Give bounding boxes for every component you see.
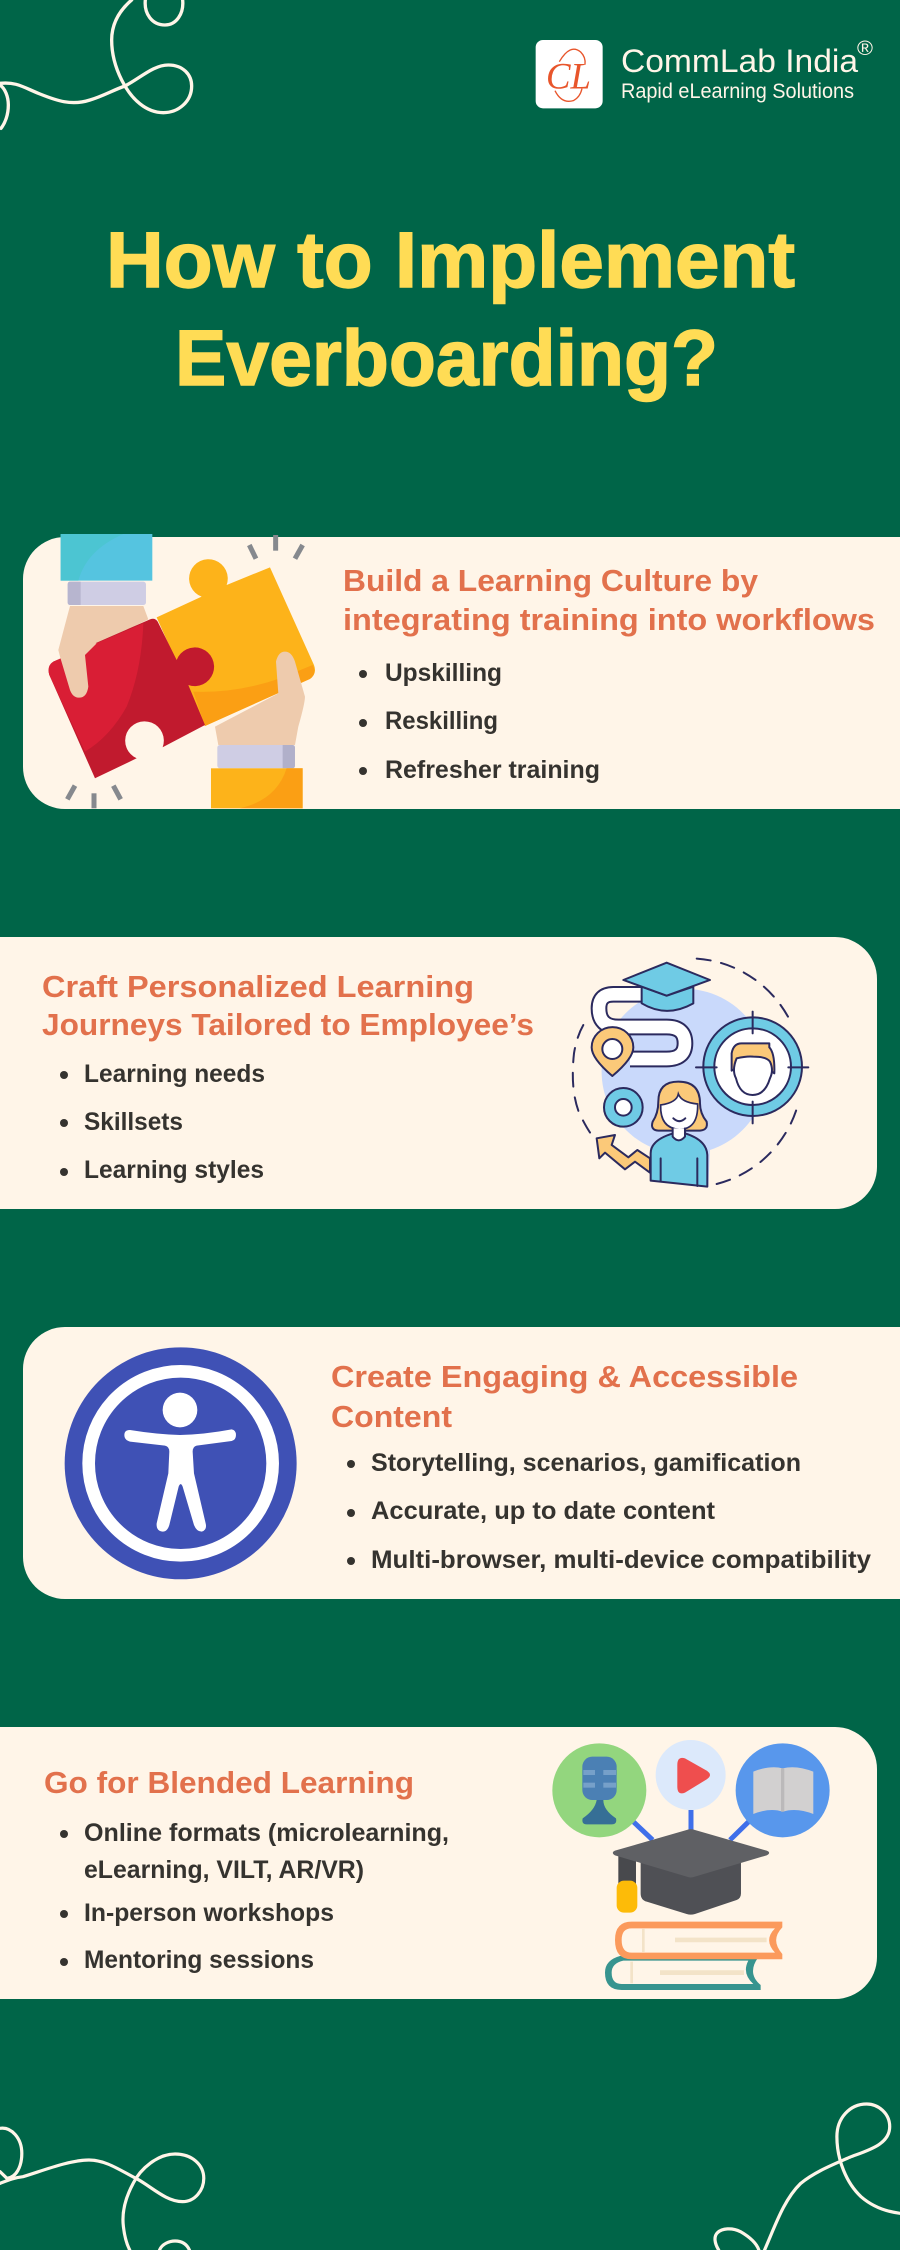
- bullet list: [359, 659, 600, 784]
- bullet list: Reskilling: [385, 707, 498, 735]
- bullet list: Accurate, up to date content: [371, 1497, 716, 1525]
- logo tagline: Rapid eLearning Solutions: [621, 80, 854, 103]
- bullet list: Refresher training: [385, 756, 600, 784]
- bullet list: [347, 1449, 871, 1574]
- heading: Journeys Tailored to Employee’s: [42, 1007, 534, 1042]
- icon: learning journey: [573, 958, 808, 1187]
- bullet list: eLearning, VILT, AR/VR): [84, 1856, 364, 1884]
- bullet list: Multi-browser, multi-device compatibility: [371, 1546, 871, 1574]
- panel: engaging content: [23, 1327, 900, 1599]
- registered mark: ®: [857, 38, 873, 60]
- decorative swirl: bottom right: [715, 2104, 900, 2250]
- logo badge: [536, 40, 603, 108]
- heading: integrating training into workflows: [343, 602, 875, 637]
- bullet list: Upskilling: [385, 659, 502, 687]
- panel: blended learning: [0, 1727, 877, 1999]
- heading: Craft Personalized Learning: [42, 969, 474, 1004]
- bullet list: Mentoring sessions: [84, 1946, 314, 1974]
- heading: [42, 969, 534, 1042]
- title: [106, 215, 795, 402]
- logo name: CommLab India: [621, 43, 858, 79]
- logo: [536, 38, 873, 108]
- bullet list: In-person workshops: [84, 1899, 334, 1927]
- decorative swirl: bottom left: [0, 2128, 204, 2250]
- bullet list: Skillsets: [84, 1108, 183, 1136]
- bullet list: Learning needs: [84, 1060, 265, 1088]
- heading: [343, 563, 875, 637]
- heading: Content: [331, 1399, 452, 1434]
- bullet list: Online formats (microlearning,: [84, 1819, 449, 1847]
- bullet list: Learning styles: [84, 1156, 264, 1184]
- bullet list: Storytelling, scenarios, gamification: [371, 1449, 801, 1477]
- panel: learning culture: [23, 534, 900, 809]
- heading: Create Engaging & Accessible: [331, 1359, 798, 1394]
- bullet list: [60, 1060, 265, 1184]
- logo badge: CL: [546, 56, 591, 97]
- icon: graduation cap with media and books: [552, 1740, 830, 1990]
- heading: Build a Learning Culture by: [343, 563, 759, 598]
- heading: Go for Blended Learning: [44, 1765, 414, 1800]
- decorative swirl: top left: [0, 0, 192, 128]
- bullet list: [60, 1819, 449, 1974]
- title: How to Implement: [106, 215, 795, 304]
- title: Everboarding?: [175, 313, 718, 402]
- icon: accessibility figure: [65, 1347, 297, 1579]
- icon: puzzle hands: [49, 534, 315, 808]
- heading: [331, 1359, 798, 1434]
- panel: personalized journeys: [0, 937, 877, 1209]
